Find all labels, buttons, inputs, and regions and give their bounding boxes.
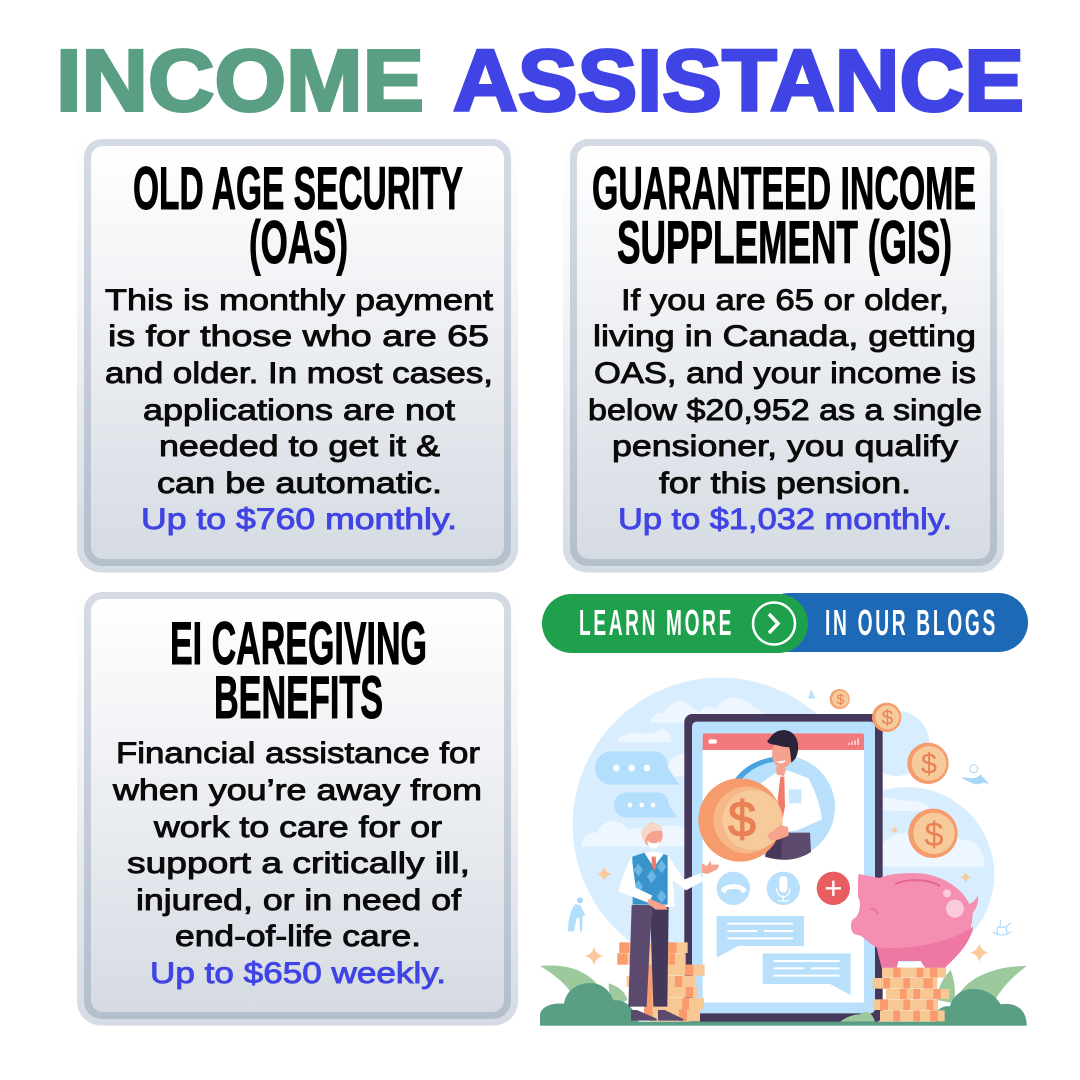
text block: GIS description: living in Canada, getting	[593, 320, 976, 353]
amount: OAS: Up to $760 monthly.	[141, 503, 457, 536]
text block: GIS description	[588, 284, 982, 500]
panel: EI caregiving benefits	[77, 585, 518, 1026]
text block: GIS description: for this pension.	[659, 467, 911, 500]
floating coins: $	[836, 691, 844, 707]
floating coins: $	[924, 816, 944, 854]
text block: OAS description: applications are not	[143, 394, 455, 427]
senior man	[619, 823, 719, 1021]
man with coin	[698, 730, 835, 862]
text block: OAS description: needed to get it &	[159, 430, 440, 463]
heading: OAS	[133, 155, 463, 276]
button: learn more in our blogs: LEARN MORE	[579, 602, 734, 643]
text block: OAS description	[105, 284, 493, 500]
title: INCOME	[56, 32, 424, 130]
text block: OAS description: This is monthly payment	[105, 284, 493, 317]
amount: GIS: Up to $1,032 monthly.	[618, 503, 952, 536]
floating coins: $	[882, 707, 894, 730]
heading: EI: EI CAREGIVING	[170, 610, 427, 677]
heading: EI	[170, 610, 427, 731]
panel: old age security	[77, 132, 518, 572]
text block: OAS description: is for those who are 65	[108, 320, 489, 353]
chat messages	[717, 916, 851, 995]
plants left	[540, 965, 640, 1026]
illustration: seniors, tablet, coins and piggy bank	[540, 678, 1027, 1026]
heading: GIS	[592, 155, 976, 276]
text block: GIS description: pensioner, you qualify	[612, 430, 958, 463]
floating coins	[830, 689, 958, 858]
text block: EI description: when you’re away from	[112, 774, 482, 807]
man with coin: $	[728, 791, 756, 847]
text block: EI description: end-of-life care.	[175, 920, 421, 953]
floating coins: $	[921, 749, 937, 781]
icon: arrow circle	[753, 602, 795, 644]
plants right	[840, 966, 1027, 1026]
heading: OAS: (OAS)	[249, 209, 348, 276]
text block: GIS description: If you are 65 or older,	[621, 284, 949, 317]
title	[56, 32, 1024, 130]
text block: EI description: support a critically ill,	[127, 847, 470, 880]
text block: OAS description: can be automatic.	[157, 467, 442, 500]
amount: EI: Up to $650 weekly.	[150, 957, 446, 990]
speech bubbles	[595, 751, 679, 817]
ground	[540, 1022, 1027, 1026]
call, microphone and plus buttons	[717, 872, 850, 905]
text block: GIS description: OAS, and your income is	[594, 357, 976, 390]
text block: EI description: Financial assistance for	[116, 737, 480, 770]
sky background	[573, 678, 994, 972]
sparkles and tiny icons	[568, 689, 1011, 965]
text block: OAS description: and older. In most cases,	[105, 357, 493, 390]
tablet	[684, 714, 883, 1022]
piggy bank	[851, 873, 978, 968]
heading: OAS: OLD AGE SECURITY	[133, 155, 463, 222]
text block: EI description: injured, or in need of	[136, 884, 462, 917]
button: learn more in our blogs	[542, 593, 1028, 653]
text block: EI description: work to care for or	[153, 811, 442, 844]
coin stacks	[617, 942, 949, 1021]
text block: EI description	[112, 737, 482, 953]
title: ASSISTANCE	[453, 32, 1024, 130]
heading: EI: BENEFITS	[214, 664, 383, 731]
text block: GIS description: below $20,952 as a single	[588, 394, 982, 427]
panel: guaranteed income supplement	[563, 132, 1004, 572]
